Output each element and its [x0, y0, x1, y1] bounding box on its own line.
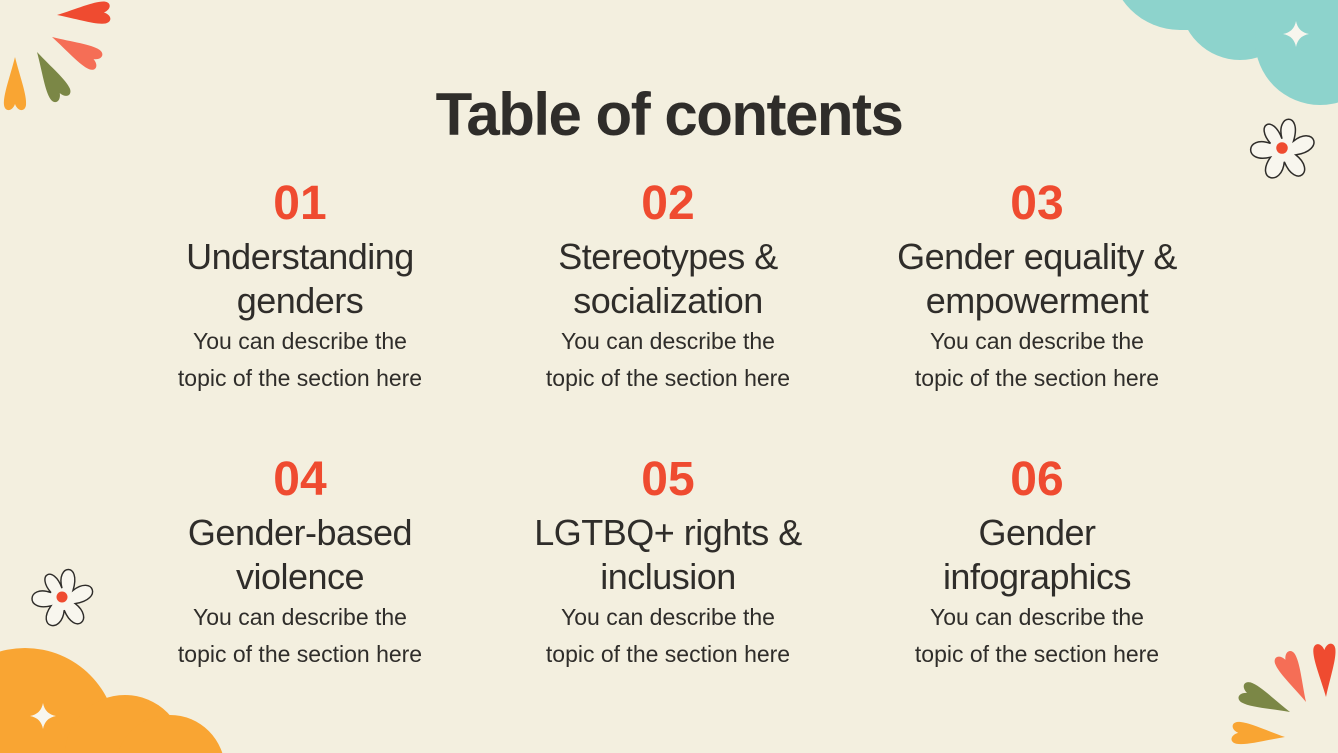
item 06: topic of the section here [915, 641, 1159, 667]
item 05: inclusion [600, 556, 736, 597]
item 02: socialization [573, 280, 763, 321]
item 03: empowerment [926, 280, 1148, 321]
item 04: Gender-based [188, 512, 412, 553]
item 05: You can describe the [561, 604, 775, 630]
item 03: Gender equality & [897, 236, 1177, 277]
leaves bottom-right [1231, 644, 1337, 748]
item 06: infographics [943, 556, 1131, 597]
title: Table of contents [436, 81, 902, 148]
item 01: Understanding [186, 236, 414, 277]
item 04 [178, 453, 422, 667]
item 01 [178, 177, 422, 391]
item 06: Gender [978, 512, 1096, 553]
orange cloud [0, 648, 225, 753]
teal cloud [1110, 0, 1338, 105]
item 04: You can describe the [193, 604, 407, 630]
item 04: violence [236, 556, 364, 597]
item 06 [915, 453, 1159, 667]
leaves top-left [4, 1, 111, 110]
item 04: 04 [273, 453, 327, 506]
item 01: topic of the section here [178, 365, 422, 391]
item 04: topic of the section here [178, 641, 422, 667]
item 05: 05 [641, 453, 695, 506]
item 03: You can describe the [930, 328, 1144, 354]
item 01: genders [237, 280, 363, 321]
item 06: You can describe the [930, 604, 1144, 630]
item 02: 02 [641, 177, 695, 230]
item 02: topic of the section here [546, 365, 790, 391]
item 01: You can describe the [193, 328, 407, 354]
item 02: You can describe the [561, 328, 775, 354]
item 02: Stereotypes & [558, 236, 778, 277]
item 05 [534, 453, 802, 667]
item 02 [546, 177, 790, 391]
item 06: 06 [1010, 453, 1064, 506]
item 03 [897, 177, 1177, 391]
item 01: 01 [273, 177, 327, 230]
item 05: topic of the section here [546, 641, 790, 667]
flower top-right [1251, 119, 1314, 178]
item 05: LGTBQ+ rights & [534, 512, 802, 553]
item 03: 03 [1010, 177, 1064, 230]
item 03: topic of the section here [915, 365, 1159, 391]
flower bottom-left [32, 570, 93, 626]
